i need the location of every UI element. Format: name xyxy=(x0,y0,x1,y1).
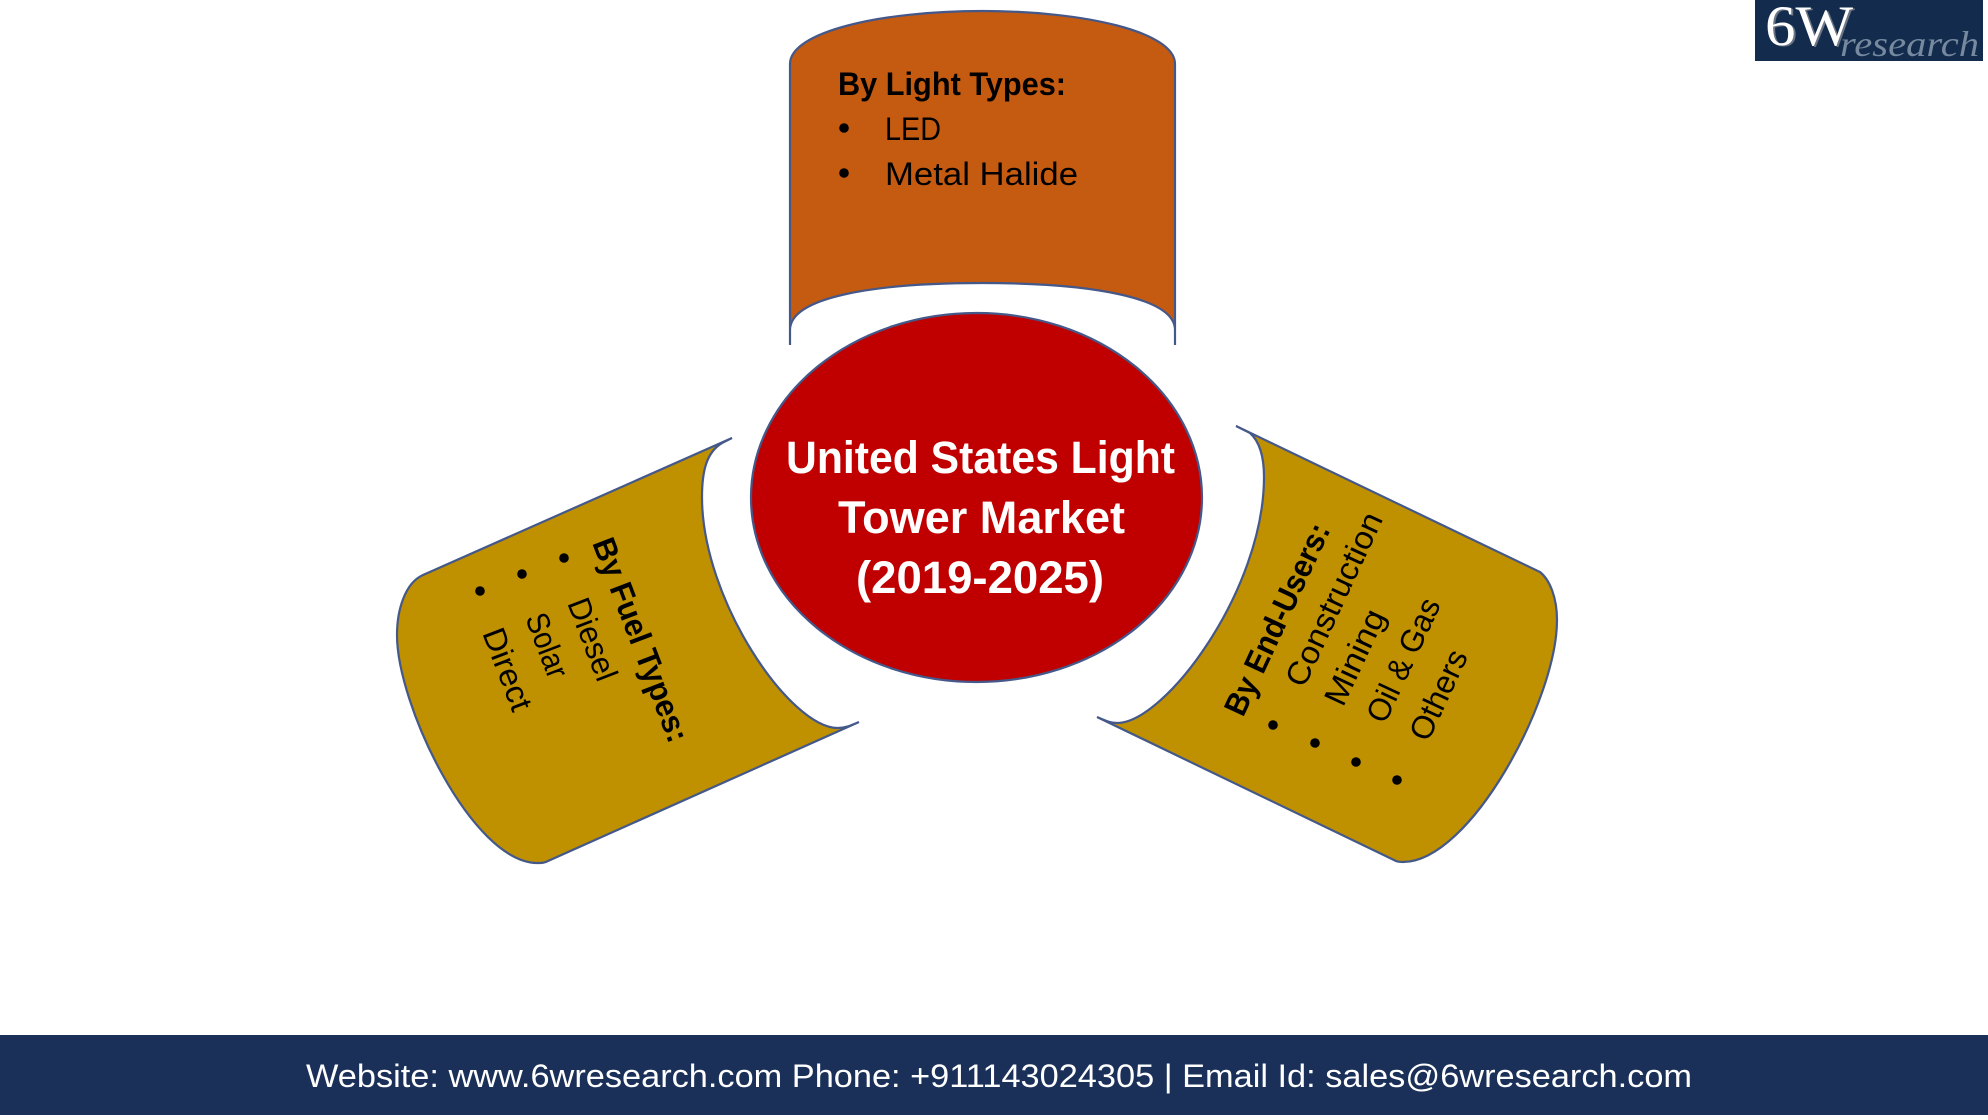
title xyxy=(786,432,1175,603)
list: fuel types: Direct xyxy=(475,623,540,716)
list: fuel types: Diesel xyxy=(560,593,625,686)
footer bar xyxy=(0,1035,1988,1115)
list: fuel types: Solar xyxy=(518,608,576,683)
title: Tower Market xyxy=(838,492,1125,543)
title: (2019-2025) xyxy=(856,552,1104,603)
heading: by fuel types: By Fuel Types: xyxy=(585,533,696,747)
list: end-users xyxy=(1268,506,1475,785)
logo: 6Wresearch: research xyxy=(1840,24,1979,64)
logo: 6Wresearch xyxy=(1755,0,1983,64)
list: light types: Metal Halide xyxy=(885,156,1078,192)
list: fuel types xyxy=(475,553,625,716)
list: light types: LED xyxy=(885,111,941,147)
panel: by end-users xyxy=(1097,426,1557,862)
heading: by end-users: By End-Users: xyxy=(1217,517,1337,721)
list: end-users: Construction xyxy=(1278,506,1390,692)
list: end-users: Mining xyxy=(1317,603,1392,711)
footer contact text: Website: www.6wresearch.com Phone: +911143024305 | Email Id: sales@6wresearch.com xyxy=(306,1058,1692,1094)
list: end-users: Others xyxy=(1402,644,1475,746)
list: end-users: Oil & Gas xyxy=(1359,592,1448,728)
panel: by fuel types xyxy=(397,438,859,863)
title: United States Light xyxy=(786,432,1175,483)
list: light types xyxy=(839,111,1078,192)
central ellipse: market title xyxy=(751,313,1202,682)
heading: by light types: By Light Types: xyxy=(838,66,1066,102)
panel: by light types xyxy=(790,11,1175,345)
